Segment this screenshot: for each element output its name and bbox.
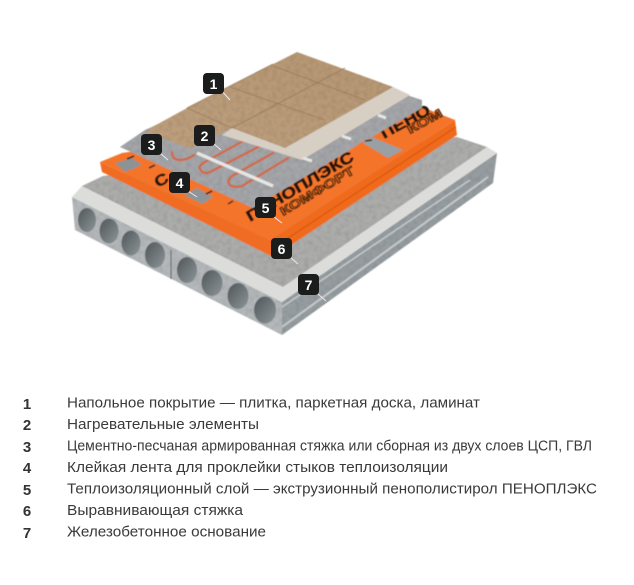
badge 4 [169, 172, 197, 197]
legend item 3: 3 [23, 439, 31, 456]
badge 5: 5 [262, 200, 270, 216]
layer 1: floor tiles [145, 52, 393, 149]
legend item 1: Напольное покрытие — плитка, паркетная доска, ламинат [67, 396, 480, 412]
badge 2 [194, 125, 221, 150]
legend item 4: Клейкая лента для проклейки стыков теплоизоляции [67, 460, 448, 476]
layer 3: cement-sand screed [120, 60, 422, 208]
badge 4: 4 [176, 175, 184, 191]
legend item 4: 4 [23, 460, 32, 477]
badge 7 [298, 274, 326, 301]
board lettering: КОМ [405, 107, 445, 136]
layer 4: adhesive tape strips [115, 137, 403, 204]
board lettering: ПЕНО [377, 101, 433, 142]
floor construction illustration [72, 52, 497, 335]
badge 2: 2 [201, 128, 209, 144]
legend item 2: 2 [23, 417, 31, 434]
layer 2: heating cables [172, 140, 288, 187]
board lettering: С [151, 169, 172, 191]
badge 3: 3 [148, 137, 156, 153]
legend item 5: 5 [23, 482, 31, 499]
legend item 6: Выравнивающая стяжка [67, 503, 244, 519]
legend item 7: 7 [23, 525, 31, 542]
legend item 7: Железобетонное основание [67, 524, 266, 540]
board lettering: ПЕНОПЛЭКС [243, 147, 357, 225]
board lettering: КОМФОРТ [278, 163, 357, 218]
pale underlay strip [222, 87, 410, 160]
badge 7: 7 [305, 277, 313, 293]
layer 7: reinforced concrete hollow slab [72, 147, 497, 335]
legend item 2: Нагревательные элементы [67, 417, 259, 433]
badge 1: 1 [210, 76, 218, 92]
legend item 3: Цементно-песчаная армированная стяжка или сборная из двух слоев ЦСП, ГВЛ [67, 438, 592, 454]
layer 6: levelling screed [82, 137, 487, 287]
legend item 5: Теплоизоляционный слой — экструзионный пенополистирол ПЕНОПЛЭКС [67, 482, 597, 498]
board lettering [151, 101, 445, 225]
badge 5 [255, 197, 282, 223]
layer 5: PENOPLEX insulation board [100, 101, 457, 257]
badge 1 [203, 73, 230, 100]
legend [23, 396, 597, 542]
badge 3 [141, 134, 168, 160]
white fixing strips [197, 115, 386, 186]
legend item 6: 6 [23, 503, 31, 520]
legend item 1: 1 [23, 396, 31, 413]
badge 6: 6 [278, 241, 286, 257]
badge 6 [271, 238, 298, 264]
